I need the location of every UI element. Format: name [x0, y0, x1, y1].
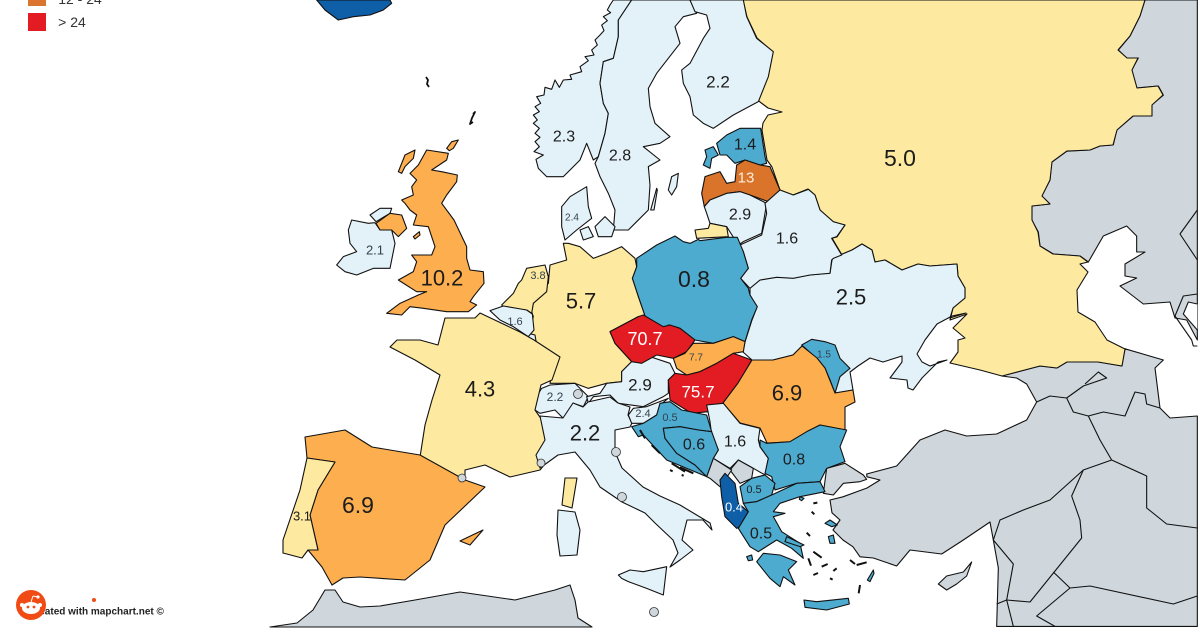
- United Kingdom: [376, 140, 484, 315]
- Moldova: [802, 339, 850, 393]
- label: Bulgaria: 0.8: [783, 452, 805, 468]
- Switzerland: [530, 383, 588, 418]
- label: Spain: 6.9: [342, 492, 374, 518]
- Kosovo: [730, 460, 753, 483]
- legend: [28, 0, 102, 31]
- northern islets: Faroes and Shetland: [426, 77, 475, 124]
- Cyprus: [938, 562, 972, 590]
- label: Denmark: 2.4: [565, 212, 579, 224]
- Spain: [305, 430, 485, 585]
- label: North Macedonia: 0.5: [746, 484, 762, 496]
- label: Romania: 6.9: [772, 380, 802, 406]
- Croatia: [632, 402, 712, 477]
- label: Lithuania: 2.9: [729, 206, 751, 224]
- label: Croatia: 0.5: [662, 412, 678, 424]
- label: Ireland: 2.1: [366, 242, 384, 258]
- label: Finland: 2.2: [706, 72, 730, 92]
- label: Slovakia: 7.7: [689, 352, 703, 364]
- Aegean small islands: [640, 430, 867, 593]
- legend swatch: over 24: [28, 13, 46, 31]
- Bosnia and Herzegovina: [663, 427, 718, 477]
- Romania: [723, 346, 855, 443]
- Belarus: [740, 189, 845, 288]
- Serbia: [707, 403, 768, 475]
- borders between grey countries: [993, 210, 1197, 626]
- label: Albania: 0.4: [725, 500, 743, 514]
- Portugal: [283, 458, 335, 558]
- orange dot: [92, 598, 96, 602]
- Corsica: [562, 478, 577, 508]
- North Africa: [270, 585, 592, 627]
- Estonia: [703, 128, 767, 168]
- label: Latvia: 13: [738, 170, 754, 186]
- Bulgaria: [760, 425, 847, 490]
- label: Serbia: 1.6: [724, 434, 746, 450]
- Greece: [738, 482, 874, 610]
- Norway: [533, 0, 632, 177]
- Kazakhstan and Central Asia: [1032, 0, 1197, 340]
- Caucasus, Turkey and Middle East: [830, 349, 1197, 626]
- Albania: [720, 473, 748, 528]
- Luxembourg: [528, 333, 537, 345]
- label: Belgium: 1.6: [507, 316, 523, 328]
- label: France: 4.3: [465, 376, 495, 402]
- label: Greece: 0.5: [750, 526, 772, 542]
- label: United Kingdom: 10.2: [421, 266, 463, 290]
- Belgium: [490, 306, 534, 337]
- label: Bosnia and Herzegovina: 0.6: [683, 436, 705, 454]
- Sicily: [618, 567, 667, 595]
- Iceland: [317, 0, 392, 20]
- Montenegro: [707, 458, 732, 487]
- Ireland: [337, 208, 395, 275]
- label: Russia: 5.0: [884, 145, 916, 171]
- label: Hungary: 75.7: [681, 382, 715, 402]
- microstate markers: [458, 390, 658, 616]
- label: Estonia: 1.4: [734, 136, 756, 154]
- France: [390, 313, 560, 480]
- label: Germany: 5.7: [566, 288, 596, 314]
- Balkans (frame 4): [618, 398, 874, 610]
- European Turkey: [823, 463, 867, 495]
- Germany: [528, 243, 645, 388]
- label: Slovenia: 2.4: [635, 408, 651, 420]
- label: Czech Republic: 70.7: [627, 329, 663, 349]
- Sweden: [595, 0, 697, 230]
- icon: reddit badge: [16, 590, 46, 620]
- North Macedonia: [740, 475, 775, 503]
- Ukraine: [743, 244, 966, 393]
- Gotland: [668, 173, 678, 195]
- label: Portugal: 3.1: [293, 508, 311, 524]
- British Isles and Low Countries (frame 3): [337, 140, 548, 337]
- Slovakia: [673, 337, 745, 375]
- label: Norway: 2.3: [553, 128, 575, 146]
- Lithuania: [704, 192, 767, 245]
- label: Netherlands: 3.8: [530, 270, 546, 282]
- label: Italy: 2.2: [570, 420, 600, 446]
- Poland: [632, 236, 757, 343]
- label: Moldova: 1.5: [817, 350, 831, 360]
- Czech Republic: [610, 315, 695, 363]
- Oland: [651, 188, 657, 210]
- Central Europe (frame 2): [528, 189, 850, 418]
- label: Sweden: 2.8: [609, 148, 631, 164]
- label: Switzerland: 2.2: [547, 390, 564, 404]
- legend swatch: 12 - 24: [28, 0, 46, 6]
- Nordic and Baltic countries (frame 1): [533, 0, 780, 245]
- legend label: over 24: > 24: [58, 14, 86, 30]
- background land: non-data countries in grey: [270, 0, 1197, 627]
- Italy: [536, 397, 712, 567]
- label: Belarus: 1.6: [776, 230, 798, 248]
- label: Austria: 2.9: [628, 376, 652, 394]
- label: Poland: 0.8: [678, 266, 710, 292]
- Sardinia: [557, 510, 580, 556]
- credit text: Created with mapchart.net ©: [28, 606, 164, 618]
- Hungary: [668, 353, 752, 413]
- Latvia: [702, 160, 780, 207]
- Finland: [682, 0, 773, 128]
- Denmark: [562, 187, 615, 240]
- value labels: [293, 72, 916, 542]
- label: Ukraine: 2.5: [836, 284, 866, 310]
- Austria: [587, 355, 675, 407]
- Slovenia: [628, 398, 668, 423]
- Russia: [743, 0, 1163, 376]
- Kaliningrad: [695, 223, 728, 238]
- Netherlands: [502, 265, 548, 313]
